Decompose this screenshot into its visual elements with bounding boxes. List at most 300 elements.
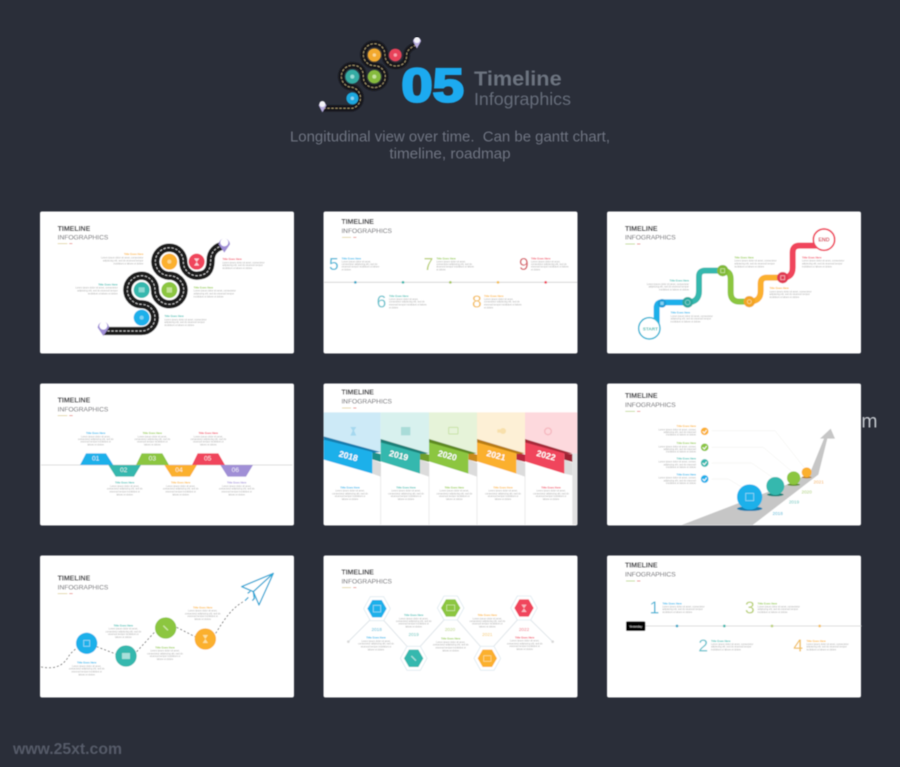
text: 2021: Lorem ipsum dolor sit amet, <box>473 617 502 620</box>
text: teal <box>106 623 142 639</box>
item 4: Title Goes Here <box>806 639 826 643</box>
heading: TIMELINE <box>58 575 91 582</box>
item 1 <box>650 597 705 617</box>
item 3: Title Goes Here <box>758 601 778 605</box>
text: 2021 <box>470 613 506 629</box>
text: orange: Title Goes Here <box>677 424 697 428</box>
column: 2018: 2018 <box>338 449 359 463</box>
item 6: 6 <box>377 292 386 312</box>
text: 2020: Title Goes Here <box>445 485 465 489</box>
hexagon 2022 <box>511 596 537 620</box>
text: 2021: Lorem ipsum dolor sit amet, <box>488 490 518 493</box>
panel: winding road timeline <box>40 212 294 354</box>
hexagon 2020 <box>437 596 464 620</box>
item 5: Lorem ipsum dolor sit amet, <box>342 260 371 263</box>
text: 03: Lorem ipsum dolor sit amet, <box>138 435 167 438</box>
item 7: consectetur adipiscing elit, sed do <box>436 263 473 266</box>
text: teal: incididunt ut labore et dolore <box>666 466 697 469</box>
text: 2021: eiusmod tempor incididunt ut <box>472 623 503 626</box>
stray watermark letter: m <box>861 411 877 432</box>
timeline axis <box>645 625 862 627</box>
text: blue: Title Goes Here <box>677 472 697 476</box>
zigzag connector <box>347 620 554 647</box>
heading: INFOGRAPHICS <box>341 399 393 406</box>
text: orange stop <box>101 252 144 265</box>
heading: INFOGRAPHICS <box>341 578 393 585</box>
text: 2022 <box>533 485 569 501</box>
heading: INFOGRAPHICS <box>341 228 393 235</box>
item 4 <box>793 635 849 655</box>
heading: TIMELINE <box>341 390 374 397</box>
text: orange: eiusmod tempor incididunt ut <box>187 615 218 618</box>
text: 2018: Title Goes Here <box>340 485 360 489</box>
text: 02: consectetur adipiscing elit, sed do <box>107 488 143 491</box>
icon: rising arrow road <box>682 429 835 525</box>
text: 01 <box>78 431 114 447</box>
item 9 <box>519 254 569 274</box>
item 3: 3 <box>745 597 755 617</box>
heading <box>625 226 676 244</box>
text: orange stop: incididunt ut labore et dolore <box>113 262 144 265</box>
text: teal: eiusmod tempor incididunt ut <box>108 633 139 636</box>
item 8: 8 <box>472 292 482 312</box>
text: 2019 <box>388 485 424 501</box>
column: 2022 <box>525 412 577 475</box>
text: green <box>658 441 697 454</box>
item 2: adipiscing elit, sed do eiusmod tempor <box>711 646 752 649</box>
text: 03 <box>135 431 171 447</box>
text: 05: Lorem ipsum dolor sit amet, <box>194 435 223 438</box>
text: 01: Lorem ipsum dolor sit amet, <box>81 435 111 438</box>
text: blue: labore et dolore <box>78 673 96 676</box>
heading <box>341 569 393 588</box>
text: teal stop: Title Goes Here <box>98 283 118 287</box>
heading: TIMELINE <box>625 226 658 233</box>
text: 01: eiusmod tempor incididunt ut <box>80 441 111 444</box>
year labels: 2021 <box>813 480 824 485</box>
item 4: adipiscing elit, sed do eiusmod tempor <box>806 646 847 649</box>
item 8: eiusmod tempor incididunt ut labore <box>484 303 522 306</box>
column: 2018 <box>324 412 381 477</box>
text: green <box>734 255 777 268</box>
text: teal stop: Lorem ipsum dolor sit amet, consectetur <box>75 287 118 290</box>
item 2: 2 <box>698 635 708 655</box>
subtitle: Infographics: Infographics <box>474 89 571 109</box>
text: 2020: Lorem ipsum dolor sit amet, <box>440 490 469 493</box>
text: 02: Title Goes Here <box>115 481 135 485</box>
item 7: eiusmod tempor incididunt ut labore <box>436 266 475 269</box>
text: 2021: Title Goes Here <box>493 485 513 489</box>
heading: INFOGRAPHICS <box>625 402 676 409</box>
text: orange: Title Goes Here <box>769 286 789 290</box>
text: 2019 <box>396 613 432 629</box>
text: teal <box>658 456 697 469</box>
text: red stop: incididunt ut labore et dolore <box>222 267 253 270</box>
text: 2018 <box>358 636 394 651</box>
item 1: 1 <box>650 597 659 617</box>
text: orange <box>769 286 812 299</box>
item 5: Title Goes Here <box>342 256 362 260</box>
description: Longitudinal view over time. Can be gantt chart, <box>290 130 610 146</box>
text: blue: adipiscing elit, sed do eiusmod tempor <box>671 318 711 321</box>
text: 2020: eiusmod tempor incididunt ut <box>439 495 470 498</box>
hexagon 2021 <box>474 646 501 670</box>
text: 2020: Lorem ipsum dolor sit amet, <box>436 641 466 644</box>
text: 2018: consectetur adipiscing elit, sed do <box>358 643 394 646</box>
text: teal stop: incididunt ut labore et dolore <box>88 293 118 296</box>
text: blue <box>671 311 713 324</box>
item 6: Lorem ipsum dolor sit amet, <box>389 298 419 301</box>
text: 2018: Lorem ipsum dolor sit amet, <box>335 490 365 493</box>
text: teal: Title Goes Here <box>677 456 697 460</box>
text: 03: consectetur adipiscing elit, sed do <box>135 438 171 441</box>
text: 06: consectetur adipiscing elit, sed do <box>219 488 255 491</box>
item 2: incididunt ut labore et dolore <box>711 649 742 652</box>
text: orange stop: Title Goes Here <box>124 252 144 256</box>
road stops <box>134 254 205 326</box>
text: green stop: adipiscing elit, sed do eiusmod tempor <box>194 292 234 295</box>
connector lines <box>712 431 804 488</box>
badge: yesterday <box>626 621 645 631</box>
trapezoid segments: 05 <box>204 455 212 462</box>
text: 05 <box>191 431 227 447</box>
column: 2020: 2020 <box>437 448 458 463</box>
year labels: 2020 <box>801 489 812 494</box>
panel: rising arrow road <box>607 384 877 526</box>
text: orange stop: adipiscing elit, sed do eiusmod tempor <box>103 259 144 262</box>
text: green: incididunt ut labore et dolore <box>734 265 765 268</box>
year labels: 2018 <box>371 627 382 632</box>
heading <box>341 390 393 408</box>
text: 01: Title Goes Here <box>86 431 106 435</box>
text: blue: consectetur adipiscing elit, sed do <box>69 668 105 671</box>
text: 2020: labore et dolore <box>442 649 460 652</box>
trapezoid segments <box>80 453 253 477</box>
panel: hexagon zigzag timeline <box>324 556 578 698</box>
item 1: adipiscing elit, sed do eiusmod tempor <box>662 608 703 611</box>
text: 2020 <box>437 485 473 501</box>
text: 03: labore et dolore <box>144 444 161 447</box>
text: green stop <box>194 285 236 298</box>
item 4: 4 <box>793 635 803 655</box>
text: 2020: Title Goes Here <box>441 637 461 641</box>
text: 2018: eiusmod tempor incididunt ut <box>335 495 366 498</box>
item 5: et dolore <box>342 269 352 272</box>
text: red: incididunt ut labore et dolore <box>802 265 833 268</box>
text: orange: labore et dolore <box>194 618 212 621</box>
item 7: Title Goes Here <box>436 256 456 260</box>
text: green: Title Goes Here <box>677 441 697 445</box>
text: orange <box>185 605 221 621</box>
text: 2020: consectetur adipiscing elit, sed do <box>433 644 469 647</box>
text: 2018: consectetur adipiscing elit, sed do <box>332 492 368 495</box>
heading: TIMELINE <box>625 562 658 569</box>
item 2: Lorem ipsum dolor sit amet, consectetur <box>711 643 753 646</box>
hexagon 2018 <box>364 597 390 621</box>
item 9: et dolore <box>531 269 541 272</box>
column: 2020 <box>429 412 477 477</box>
text: blue: eiusmod tempor incididunt ut <box>71 670 102 673</box>
text: 2022: Title Goes Here <box>541 485 561 489</box>
item 6: Title Goes Here <box>389 294 409 298</box>
heading: INFOGRAPHICS <box>58 584 109 591</box>
text: blue stop: Title Goes Here <box>164 314 184 318</box>
text: 01: consectetur adipiscing elit, sed do <box>78 438 114 441</box>
hexagon 2019 <box>400 646 427 670</box>
text: blue: Title Goes Here <box>671 311 691 315</box>
text: orange: Lorem ipsum dolor sit amet, consectetur <box>769 290 812 293</box>
text: blue: Lorem ipsum dolor sit amet, consec <box>658 477 697 480</box>
item 8: Title Goes Here <box>484 294 504 298</box>
item 4: incididunt ut labore et dolore <box>806 649 837 652</box>
text: blue: Title Goes Here <box>77 661 97 665</box>
column: 2021: 2021 <box>485 448 507 463</box>
text: teal stop: adipiscing elit, sed do eiusmod tempor <box>77 290 118 293</box>
text: blue stop: incididunt ut labore et dolore <box>164 324 195 327</box>
text: 2021: eiusmod tempor incididunt ut <box>488 495 519 498</box>
item 5: consectetur adipiscing elit, sed do <box>342 263 378 266</box>
year labels: 2019 <box>408 632 419 637</box>
milestone 2021 <box>802 467 812 478</box>
text: green: eiusmod tempor incididunt ut <box>150 655 181 658</box>
text: 2022 <box>507 635 543 651</box>
text: 2021: Title Goes Here <box>478 613 498 617</box>
year labels: 2020 <box>445 627 456 632</box>
item 9: Title Goes Here <box>531 256 551 260</box>
text: 2019: consectetur adipiscing elit, sed do <box>396 620 432 623</box>
text: 05: labore et dolore <box>200 444 217 447</box>
description: timeline, roadmap <box>389 147 511 163</box>
year labels <box>772 480 824 516</box>
text: 2020: eiusmod tempor incididunt ut <box>435 646 466 649</box>
item 1: incididunt ut labore et dolore <box>662 611 693 614</box>
start badge: START <box>643 327 658 332</box>
item 3: Lorem ipsum dolor sit amet, consectetur <box>758 605 800 608</box>
milestone 2020 <box>787 471 800 486</box>
item 2: Title Goes Here <box>711 639 731 643</box>
text: 02: Lorem ipsum dolor sit amet, <box>110 485 140 488</box>
text: 06: eiusmod tempor incididunt ut <box>221 490 252 493</box>
item 3: adipiscing elit, sed do eiusmod tempor <box>758 608 798 611</box>
text: green: adipiscing elit, sed do eiusmod <box>664 448 697 451</box>
text: 04: labore et dolore <box>172 493 190 496</box>
text: orange: incididunt ut labore et dolore <box>666 434 697 437</box>
text: 04: Lorem ipsum dolor sit amet, <box>166 485 196 488</box>
text: 2022: eiusmod tempor incididunt ut <box>509 645 540 648</box>
heading <box>58 226 109 244</box>
item 8 <box>472 292 522 312</box>
column: 2019: 2019 <box>388 448 410 463</box>
text: 2018: Title Goes Here <box>366 636 386 640</box>
text: 04: consectetur adipiscing elit, sed do <box>163 488 199 491</box>
column: 2019 <box>381 412 429 477</box>
text: red stop: Title Goes Here <box>222 257 242 261</box>
item 9: consectetur adipiscing elit, sed do <box>531 263 567 266</box>
text: teal: Title Goes Here <box>670 279 690 283</box>
step circles <box>76 617 216 667</box>
item 6 <box>377 292 427 312</box>
icon: paper plane <box>242 573 273 605</box>
text: teal: consectetur adipiscing elit, sed do <box>106 630 142 633</box>
text: teal: labore et dolore <box>115 636 132 639</box>
heading: TIMELINE <box>341 569 374 576</box>
item 7 <box>424 254 475 274</box>
heading <box>58 575 109 594</box>
item 6: et dolore <box>389 306 399 309</box>
text: 2021 <box>485 485 521 501</box>
text: orange: Lorem ipsum dolor sit amet, consec <box>658 428 697 431</box>
text: red <box>802 255 844 268</box>
text: 06: labore et dolore <box>228 493 246 496</box>
text: 02: eiusmod tempor incididunt ut <box>109 490 140 493</box>
item 5: 5 <box>329 254 339 274</box>
item 8: Lorem ipsum dolor sit amet, <box>484 298 514 301</box>
text: blue <box>658 472 697 485</box>
text: 2019: Title Goes Here <box>404 613 424 617</box>
item 7: 7 <box>424 254 433 274</box>
item 1: Title Goes Here <box>662 601 682 605</box>
trapezoid segments: 03 <box>149 455 156 462</box>
text: 2022: Lorem ipsum dolor sit amet, <box>510 640 540 643</box>
item 8: consectetur adipiscing elit, sed do <box>484 301 520 304</box>
text: green: labore et dolore <box>157 658 174 661</box>
text: teal: Lorem ipsum dolor sit amet, <box>109 628 138 631</box>
text: 05: Title Goes Here <box>199 431 219 435</box>
text: blue: Lorem ipsum dolor sit amet, consectetur <box>671 315 713 318</box>
text: orange <box>658 424 697 437</box>
text: green stop: incididunt ut labore et dolore <box>194 295 224 298</box>
text: green <box>147 645 183 661</box>
text: red: Title Goes Here <box>802 255 822 259</box>
side shadow and dividers <box>381 453 577 525</box>
text: 02 <box>107 481 143 496</box>
icon: end pin <box>219 238 230 253</box>
text: 03: Title Goes Here <box>143 431 163 435</box>
panel: paper plane path <box>40 556 294 698</box>
text: 2019: Lorem ipsum dolor sit amet, <box>391 490 421 493</box>
text: green: Lorem ipsum dolor sit amet, <box>150 650 180 653</box>
checks <box>701 427 708 483</box>
text: orange: adipiscing elit, sed do eiusmod tempor <box>769 293 810 296</box>
text: 2019: eiusmod tempor incididunt ut <box>398 623 429 626</box>
item 4: Lorem ipsum dolor sit amet, consectetur <box>806 643 849 646</box>
item 9: Lorem ipsum dolor sit amet, <box>531 260 561 263</box>
text: 2021: consectetur adipiscing elit, sed do <box>470 620 506 623</box>
text: green: Title Goes Here <box>155 645 175 649</box>
text: 05: eiusmod tempor incididunt ut <box>193 441 224 444</box>
heading: TIMELINE <box>58 226 91 233</box>
text: 2019: Lorem ipsum dolor sit amet, <box>399 617 429 620</box>
timeline axis <box>324 281 577 284</box>
road <box>103 246 223 331</box>
heading: INFOGRAPHICS <box>58 235 109 242</box>
item 1: Lorem ipsum dolor sit amet, consectetur <box>662 605 705 608</box>
text: teal <box>647 279 690 292</box>
heading: TIMELINE <box>625 393 658 400</box>
heading <box>58 398 109 416</box>
text: 2019: Title Goes Here <box>396 485 416 489</box>
text: 2022: eiusmod tempor incididunt ut <box>536 495 567 498</box>
text: 2021: labore et dolore <box>479 626 496 629</box>
big number 05: 05 <box>401 59 464 112</box>
text: 2022: Lorem ipsum dolor sit amet, <box>536 490 566 493</box>
text: orange stop: Lorem ipsum dolor sit amet, consectetur <box>101 256 144 259</box>
text: red: adipiscing elit, sed do eiusmod tempor <box>802 262 843 265</box>
start badge <box>639 318 660 339</box>
text: 02: labore et dolore <box>116 493 134 496</box>
trapezoid segments: 02 <box>120 467 128 474</box>
text: orange: incididunt ut labore et dolore <box>769 296 800 299</box>
text: teal: Title Goes Here <box>114 623 134 627</box>
text: 2022: Title Goes Here <box>515 635 535 639</box>
panel: trapezoid timeline 01 to 06 <box>40 384 294 526</box>
trapezoid segments: 01 <box>92 455 100 462</box>
text: 2022: consectetur adipiscing elit, sed do <box>507 642 543 645</box>
item 5 <box>329 254 380 274</box>
text: orange: Title Goes Here <box>193 605 213 609</box>
milestone 2018 <box>737 484 762 511</box>
year labels: 2019 <box>789 500 800 505</box>
heading: TIMELINE <box>341 219 374 226</box>
text: 2021: consectetur adipiscing elit, sed do <box>485 492 521 495</box>
text: 03: eiusmod tempor incididunt ut <box>137 441 168 444</box>
text: 2019: labore et dolore <box>398 498 415 501</box>
trapezoid segments: 04 <box>175 467 183 474</box>
icon: winding road logo <box>319 37 421 112</box>
text: teal: Lorem ipsum dolor sit amet, consec <box>658 461 697 464</box>
path nodes <box>658 265 788 308</box>
text: 2018: Lorem ipsum dolor sit amet, <box>361 640 391 643</box>
panel: numbered line timeline 1 to 4 <box>607 556 862 698</box>
text: blue <box>69 661 105 676</box>
text: red stop: Lorem ipsum dolor sit amet, consectetur <box>222 261 265 264</box>
item 3: incididunt ut labore et dolore <box>758 611 788 614</box>
text: green: Lorem ipsum dolor sit amet, consectetur <box>734 260 777 263</box>
heading: TIMELINE <box>58 398 91 405</box>
text: blue: adipiscing elit, sed do eiusmod <box>664 479 697 482</box>
text: 2020 <box>433 637 469 652</box>
text: 2018: labore et dolore <box>342 498 359 501</box>
item 2 <box>698 635 753 655</box>
end badge <box>813 229 835 250</box>
heading: INFOGRAPHICS <box>625 235 676 242</box>
text: 05: consectetur adipiscing elit, sed do <box>191 438 227 441</box>
text: 2019: eiusmod tempor incididunt ut <box>391 495 422 498</box>
item 7: Lorem ipsum dolor sit amet, <box>436 260 466 263</box>
trapezoid segments: 06 <box>232 467 239 474</box>
text: 2020: labore et dolore <box>446 498 463 501</box>
text: red: Lorem ipsum dolor sit amet, consectetur <box>802 260 844 263</box>
panel: start to end path <box>607 212 861 354</box>
year labels: 2021 <box>482 632 493 637</box>
text: 06: Title Goes Here <box>227 481 247 485</box>
text: teal: Lorem ipsum dolor sit amet, consectetur <box>647 283 689 286</box>
text: 06 <box>219 481 255 496</box>
heading <box>625 562 676 581</box>
text: teal: adipiscing elit, sed do eiusmod tempor <box>649 286 689 289</box>
item 3 <box>745 597 800 617</box>
text: teal: incididunt ut labore et dolore <box>659 289 690 292</box>
text: green: Lorem ipsum dolor sit amet, consec <box>658 445 697 448</box>
text: orange: consectetur adipiscing elit, sed do <box>185 612 221 615</box>
text: 2019: labore et dolore <box>405 626 423 629</box>
item 9: 9 <box>519 254 529 274</box>
item 8: et dolore <box>484 306 494 309</box>
text: green: incididunt ut labore et dolore <box>666 451 697 454</box>
end badge: END <box>818 238 830 244</box>
text: teal: adipiscing elit, sed do eiusmod <box>664 463 697 466</box>
text: orange: adipiscing elit, sed do eiusmod <box>664 431 697 434</box>
